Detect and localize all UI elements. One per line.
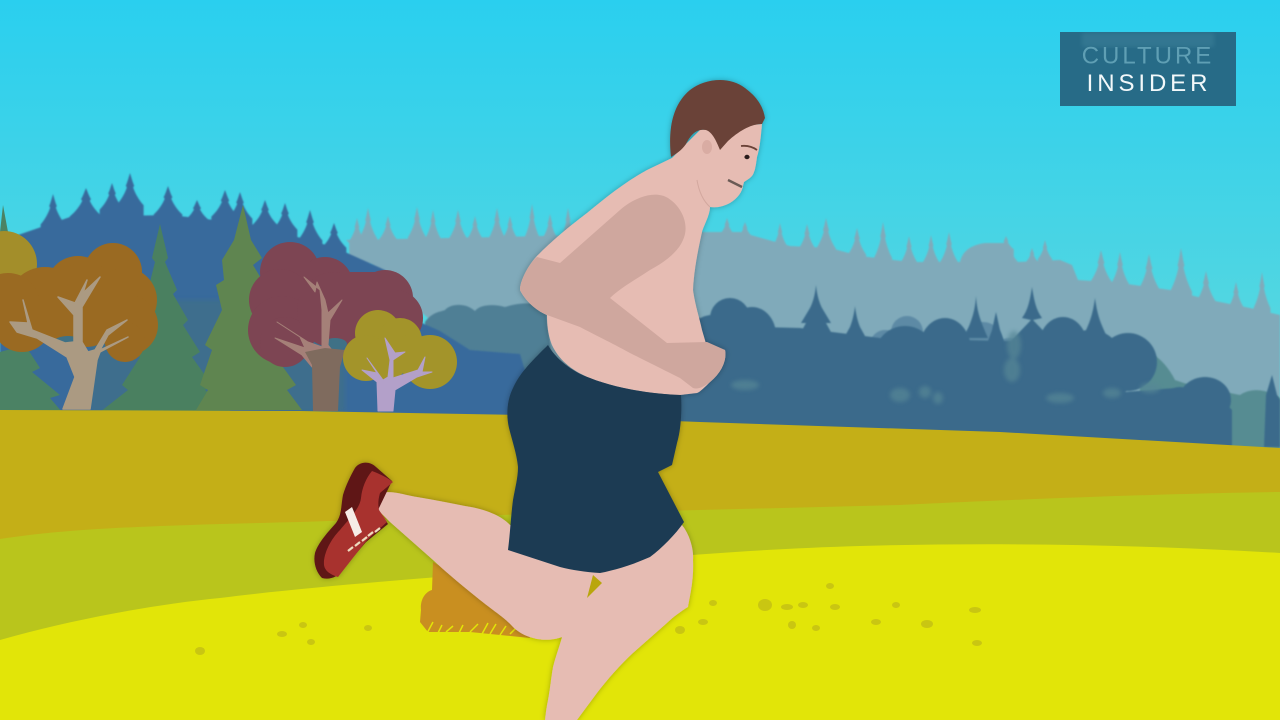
far grey forest ridge	[346, 204, 1280, 460]
gap between legs	[587, 575, 602, 598]
teal-green hill, far right	[1140, 350, 1280, 450]
trunk	[305, 348, 345, 411]
hair	[670, 80, 765, 157]
dirt clump with grass	[420, 562, 530, 638]
ear	[702, 140, 712, 154]
tree: yellow	[343, 310, 457, 411]
trunk and branches	[362, 338, 432, 411]
eye and brow	[741, 146, 757, 159]
shoe laces	[348, 528, 380, 551]
arm	[520, 195, 725, 389]
jaw line	[697, 180, 710, 207]
shoe upper	[324, 471, 393, 577]
shoe	[314, 463, 393, 579]
ground: olive field	[0, 410, 1280, 720]
teal hill behind runner	[425, 303, 560, 420]
ground specks	[195, 583, 982, 655]
light foliage patches in dark forest	[731, 331, 1160, 404]
torso and head	[520, 124, 762, 395]
tree: orange	[0, 243, 158, 409]
shorts	[507, 345, 684, 573]
shaded lower hill behind conifers	[90, 300, 345, 412]
mouth	[728, 180, 742, 187]
shoe sole	[314, 463, 392, 579]
logo streaks	[1082, 33, 1214, 47]
trunk and branches	[10, 277, 128, 409]
conifer: olive green	[196, 205, 302, 410]
logo: Culture Insider	[1060, 32, 1236, 106]
pale round trees behind dark forest	[870, 316, 1032, 382]
logo: CULTURE: CULTURE	[1082, 42, 1214, 70]
branches	[275, 277, 342, 367]
logo: INSIDER: INSIDER	[1087, 70, 1211, 97]
dark forest, right	[660, 285, 1280, 447]
shoe stripe	[345, 507, 362, 537]
conifer: far-left tip and base	[0, 205, 62, 412]
tree: red	[248, 242, 423, 411]
runner	[314, 80, 765, 720]
ground: green band	[0, 492, 1280, 720]
conifers, left	[0, 205, 302, 412]
raised rear leg and front leg	[378, 492, 693, 720]
sky background	[0, 0, 1280, 450]
tree: olive, far left	[0, 231, 37, 297]
ground: bright yellow hill	[0, 544, 1280, 720]
conifer: green	[100, 224, 232, 412]
blue forested hill, left	[0, 173, 540, 420]
